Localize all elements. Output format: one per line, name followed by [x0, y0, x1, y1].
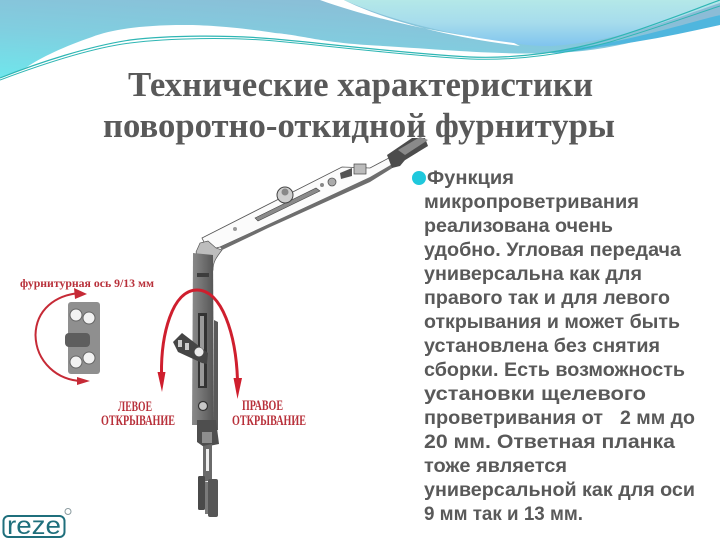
hardware diagram: corner drive fitting [173, 137, 428, 517]
body text: 9 мм так и 13 мм. [424, 504, 583, 525]
header wave decoration [0, 0, 720, 80]
vertical plate [192, 253, 218, 430]
bullet marker [412, 171, 426, 185]
body text: удобно. Угловая передача [424, 240, 681, 261]
body text: реализована очень [424, 216, 613, 237]
lower teeth [198, 476, 218, 517]
label: left opening [101, 399, 175, 429]
label: right opening: ПРАВОЕ [242, 398, 283, 414]
corner joint [196, 241, 222, 270]
body text: универсальной как для оси [424, 480, 695, 501]
title: поворотно-откидной фурнитуры [103, 106, 615, 145]
horizontal arm [202, 137, 428, 250]
logo: reze: reze [7, 512, 61, 540]
body text: 2 мм до [620, 408, 695, 429]
icon: axis plate with rotation arrow [36, 288, 100, 385]
label: left opening: ОТКРЫВАНИЕ [101, 413, 175, 429]
lower lock body [197, 420, 219, 482]
body text: микропроветривания [424, 192, 639, 213]
body text: проветривания от [424, 408, 603, 429]
title [103, 65, 615, 145]
label: left opening: ЛЕВОЕ [118, 399, 152, 415]
body text: 20 мм. Ответная планка [424, 432, 675, 453]
label: hardware axis: фурнитурная ось 9/13 мм [20, 276, 154, 290]
body text: Функция [427, 168, 514, 189]
label: right opening: ОТКРЫВАНИЕ [232, 413, 306, 429]
body text: тоже является [424, 456, 567, 477]
logo: reze [4, 508, 71, 540]
body text [424, 168, 695, 525]
body text: установлена без снятия [424, 336, 660, 357]
sliding handle [173, 333, 208, 364]
title: Технические характеристики [128, 65, 593, 104]
body text: открывания и может быть [424, 312, 680, 333]
arrow: left and right opening arc [158, 290, 242, 399]
body text: установки щелевого [424, 384, 646, 405]
label: right opening [232, 398, 306, 429]
body text: правого так и для левого [424, 288, 670, 309]
body text: универсальна как для [424, 264, 642, 285]
body text: сборки. Есть возможность [424, 360, 685, 381]
